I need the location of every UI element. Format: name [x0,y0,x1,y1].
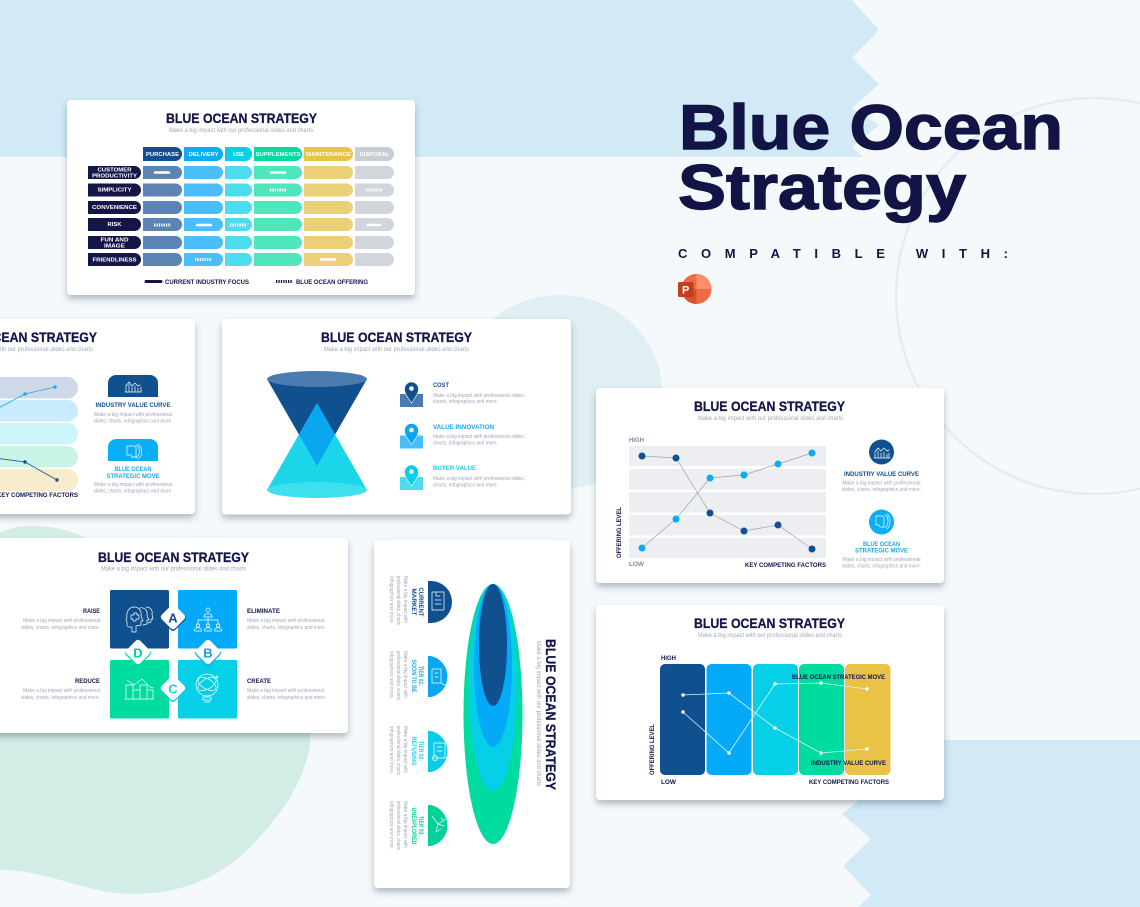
legend: blue ocean strategic move [842,510,921,570]
slide heading: BLUE OCEAN STRATEGY [543,639,559,791]
line chart: LOW [629,562,644,568]
matrix row labels: CONVENIENCE [92,205,137,211]
matrix column headers [143,147,394,161]
band chart [0,377,78,499]
four action squares [110,590,237,718]
legend: blue ocean strategic move: BLUE OCEAN [114,467,152,473]
main title: Blue Ocean [679,93,1063,163]
panel: four actions slide [0,538,348,733]
slide heading [98,549,250,572]
tier: unexplored: TIER 03: [417,816,423,836]
label: create: slides, charts, infographics and more. [247,695,326,701]
tier: current market: Make a big impact with [402,576,408,623]
matrix row labels: FUN AND [100,237,129,243]
item: cost [400,382,525,407]
panel: value curve dots slide [596,388,944,583]
item: buyer value: Make a big impact with professional slides, [433,476,525,482]
column chart with curves: HIGH [661,656,676,662]
icon: heads [126,607,153,632]
column chart with curves [650,656,890,786]
matrix cells [143,166,394,266]
label: eliminate: slides, charts, infographics and more. [247,625,326,631]
matrix row labels [88,166,141,266]
legend: industry value curve [842,440,921,493]
matrix row labels: RISK [108,222,122,228]
column chart with curves: LOW [661,780,676,786]
item: value innovation: VALUE INNOVATION [433,425,494,431]
slide heading [535,639,559,791]
item: buyer value: BUYER VALUE [433,466,476,472]
matrix column headers: DELIVERY [188,152,219,158]
line chart: OFFERING LEVEL [617,507,623,558]
label: eliminate: ELIMINATE [247,609,280,615]
tier: soon to be: SOON TO BE [410,660,416,692]
legend: BLUE OCEAN OFFERING [296,280,368,286]
main title: Strategy [678,153,966,223]
slide heading [321,329,473,353]
label: raise: Make a big impact with professional [23,618,100,624]
label: raise: RAISE [83,609,100,615]
tier: current market [388,576,452,626]
icon: PowerPoint logo: P [682,284,689,296]
icon: idea bulb [196,674,218,702]
label: create: CREATE [247,679,271,685]
slide heading: BLUE OCEAN STRATEGY [98,549,250,565]
legend: blue ocean strategic move: BLUE OCEAN [863,542,900,548]
tier: unexplored: UNEXPLORED [410,808,416,845]
slide heading: Make a big impact with our professional slides and charts [535,641,541,786]
current focus markers [155,172,380,260]
label: reduce: REDUCE [75,679,100,685]
slide heading: Make a big impact with our professional slides and charts [101,566,246,572]
slide heading: Make a big impact with our professional slides and charts [169,128,313,134]
legend: industry value curve: Make a big impact with professional [842,480,920,486]
legend: blue ocean strategic move [94,439,172,494]
matrix row labels: SIMPLICITY [98,188,132,194]
label: create [247,679,326,701]
legend [146,280,368,286]
tier: current market: professional slides, charts, [395,576,401,626]
badge C [159,675,187,703]
column chart with curves: OFFERING LEVEL [650,724,656,775]
legend: industry value curve: slides, charts, infographics and more. [842,487,921,493]
label: eliminate: Make a big impact with professional [247,618,324,624]
label: reduce [21,679,100,701]
slide heading: BLUE OCEAN STRATEGY [321,329,473,345]
item: value innovation: charts, infographics and more. [433,440,498,446]
slide heading [694,398,846,422]
hourglass cones chart [267,371,367,498]
nested ellipses chart [464,584,522,844]
slide heading: Make a big impact with our professional slides and charts [698,633,842,639]
tier: current market: CURRENT [417,588,423,617]
item: value innovation: Make a big impact with professional slides, [433,434,525,440]
legend: blue ocean strategic move: slides, charts, infographics and more. [842,564,921,570]
line chart: HIGH [629,438,644,444]
badge B: B [203,646,213,660]
item: cost: Make a big impact with professional slides, [433,393,525,399]
tier: soon to be: Make a big impact with [402,651,408,698]
blue ocean offering markers [154,190,383,260]
label: raise [21,609,100,631]
slide heading [694,615,846,639]
column chart with curves: BLUE OCEAN STRATEGIC MOVE [792,675,885,681]
legend: industry value curve: INDUSTRY VALUE CURVE [844,472,919,478]
matrix row labels: CUSTOMER [98,168,132,174]
panel: value curve columns slide [596,605,944,800]
legend: blue ocean strategic move: Make a big impact with professional [842,557,920,563]
tier: soon to be: professional slides, charts, [395,651,401,701]
item: buyer value [400,465,525,490]
slide heading [0,329,98,353]
matrix column headers: DISPOSAL [360,152,390,158]
tier: refusing: infographics and more. [388,726,394,774]
compatible with label: COMPATIBLE WITH: [678,246,1008,261]
matrix column headers: USE [233,152,244,158]
panel: value matrix slide [67,100,415,295]
legend: blue ocean strategic move: STRATEGIC MOVE [106,474,160,480]
icon: bar chart [125,679,154,699]
legend: industry value curve: slides, charts, infographics and more. [94,418,172,424]
legend: industry value curve [94,375,172,424]
panel: hourglass slide [222,319,571,514]
item: cost: charts, infographics and more. [433,399,498,405]
matrix row labels: IMAGE [104,243,125,249]
tier: soon to be [388,651,447,701]
column chart with curves: KEY COMPETING FACTORS [809,780,889,786]
badge B [194,639,222,667]
label: eliminate [247,609,326,631]
tier: refusing: Make a big impact with [402,726,408,773]
legend: blue ocean strategic move: STRATEGIC MOVE [855,548,908,554]
legend: industry value curve: INDUSTRY VALUE CURVE [96,403,170,409]
slide heading: Make a big impact with our professional slides and charts [324,347,469,353]
item: buyer value: charts, infographics and more. [433,482,498,488]
matrix column headers: PURCHASE [146,152,179,158]
matrix column headers: SUPPLEMENTS [256,152,301,158]
icon: PowerPoint logo [678,274,712,304]
label: reduce: slides, charts, infographics and more. [21,695,100,701]
slide heading [166,110,318,134]
panel: value curve bands slide (cropped) [0,319,195,514]
badge A: A [168,610,178,626]
slide heading: BLUE OCEAN STRATEGY [694,615,846,631]
matrix row labels: PRODUCTIVITY [92,173,137,179]
badge A [159,604,187,632]
tier: current market: infographics and more. [388,576,394,624]
tier: refusing: professional slides, charts, [395,726,401,776]
item: cost: COST [433,383,449,389]
label: create: Make a big impact with professional [247,688,324,694]
legend: blue ocean strategic move: slides, charts, infographics and more. [94,488,172,494]
tier: unexplored: professional slides, charts, [395,801,401,851]
matrix row labels: FRIENDLINESS [92,258,137,264]
legend: industry value curve: Make a big impact with professional [94,412,172,418]
label: raise: slides, charts, infographics and more. [21,625,100,631]
slide heading: BLUE OCEAN STRATEGY [694,398,846,414]
line chart [617,438,826,569]
label: reduce: Make a big impact with professional [23,688,100,694]
item: value innovation [400,424,525,448]
main title [678,93,1063,223]
slide heading: BLUE OCEAN STRATEGY [166,110,318,126]
tier: soon to be: TIER 01: [417,666,423,686]
badge D: D [133,646,143,660]
tier: unexplored: Make a big impact with [402,801,408,848]
tier: unexplored [388,801,447,851]
panel: market tiers slide (rotated) [374,540,570,888]
icon: org chart [194,608,222,631]
matrix column headers: MAINTENANCE [306,152,351,158]
line chart: KEY COMPETING FACTORS [745,563,826,569]
tier: current market: MARKET [410,588,416,616]
legend: CURRENT INDUSTRY FOCUS [165,280,249,286]
tier: unexplored: infographics and more. [388,801,394,849]
column chart with curves: INDUSTRY VALUE CURVE [811,761,886,767]
tier: soon to be: infographics and more. [388,651,394,699]
badge D [124,639,152,667]
badge C: C [168,682,178,696]
tier: refusing [388,726,447,776]
legend: blue ocean strategic move: Make a big impact with professional [94,482,172,488]
tier: refusing: REFUSING [410,736,416,766]
slide heading: Make a big impact with our professional slides and charts [698,416,843,422]
tier: refusing: TIER 02: [417,741,423,761]
